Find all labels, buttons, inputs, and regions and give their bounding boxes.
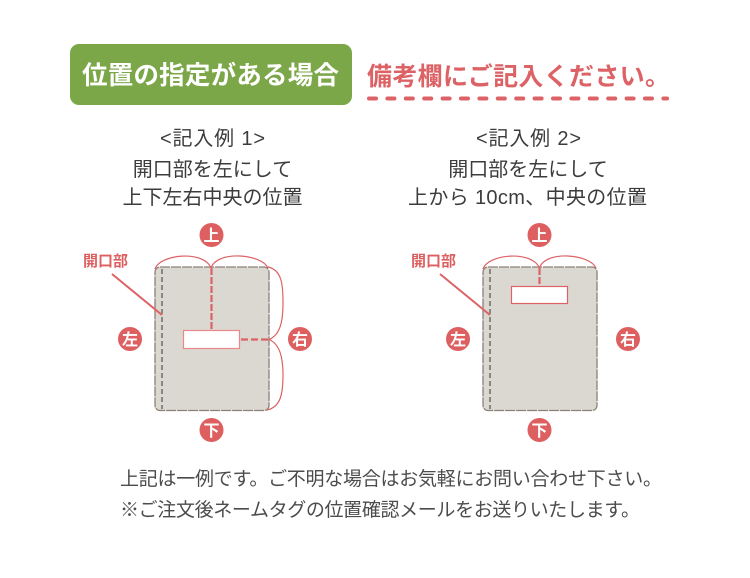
text block: example 1 caption: [122, 127, 302, 209]
marker: left: 左: [450, 331, 466, 349]
top brackets: [483, 256, 596, 269]
bag body: [483, 267, 597, 410]
bag body: [155, 267, 269, 410]
marker: left: [118, 327, 142, 351]
text block: footer notes: [120, 468, 662, 521]
text block: example 1 caption: <記入例 1>: [160, 127, 265, 150]
dashed measure vertical: [538, 268, 541, 285]
text block: example 2 caption: 開口部を左にして: [448, 158, 608, 181]
marker: right: 右: [620, 331, 636, 349]
opening stitch line: [161, 269, 163, 409]
diagram: example 2 bag: [411, 223, 640, 442]
opening label and leader: 開口部: [411, 253, 456, 270]
marker: right: 右: [292, 331, 308, 349]
dashed measure horizontal: [241, 338, 269, 341]
marker: left: [446, 327, 470, 351]
opening label and leader: 開口部: [83, 253, 128, 270]
marker: bottom: [200, 418, 224, 442]
opening label and leader: [83, 253, 162, 315]
right brackets: [267, 267, 283, 410]
marker: top: [200, 223, 224, 247]
marker: right: [288, 327, 312, 351]
text block: example 2 caption: [408, 127, 647, 209]
marker: top: 上: [203, 227, 220, 245]
heading badge: green: 位置の指定がある場合: [82, 61, 339, 90]
marker: bottom: [528, 418, 552, 442]
marker: right: [616, 327, 640, 351]
marker: left: 左: [122, 331, 138, 349]
opening label and leader: [411, 253, 490, 315]
opening stitch line: [489, 269, 491, 409]
text block: example 2 caption: <記入例 2>: [476, 127, 581, 150]
top brackets: [155, 256, 268, 269]
text block: footer notes: 上記は一例です。ご不明な場合はお気軽にお問い合わせ下さい。: [120, 468, 662, 490]
dashed measure vertical: [210, 268, 213, 330]
name tag position: [512, 286, 568, 304]
marker: bottom: 下: [531, 423, 548, 440]
diagram: example 1 bag: [83, 223, 312, 442]
heading: request text with dashed underline: 備考欄にご記入ください。: [367, 62, 670, 91]
name tag position: [184, 330, 240, 348]
marker: bottom: 下: [203, 423, 220, 440]
text block: example 1 caption: 開口部を左にして: [133, 158, 292, 181]
text block: footer notes: ※ご注文後ネームタグの位置確認メールをお送りいたします。: [120, 499, 640, 521]
text block: example 1 caption: 上下左右中央の位置: [122, 186, 302, 209]
heading badge: green: [70, 44, 352, 105]
marker: top: [528, 223, 552, 247]
marker: top: 上: [531, 227, 548, 245]
text block: example 2 caption: 上から 10cm、中央の位置: [408, 186, 647, 209]
